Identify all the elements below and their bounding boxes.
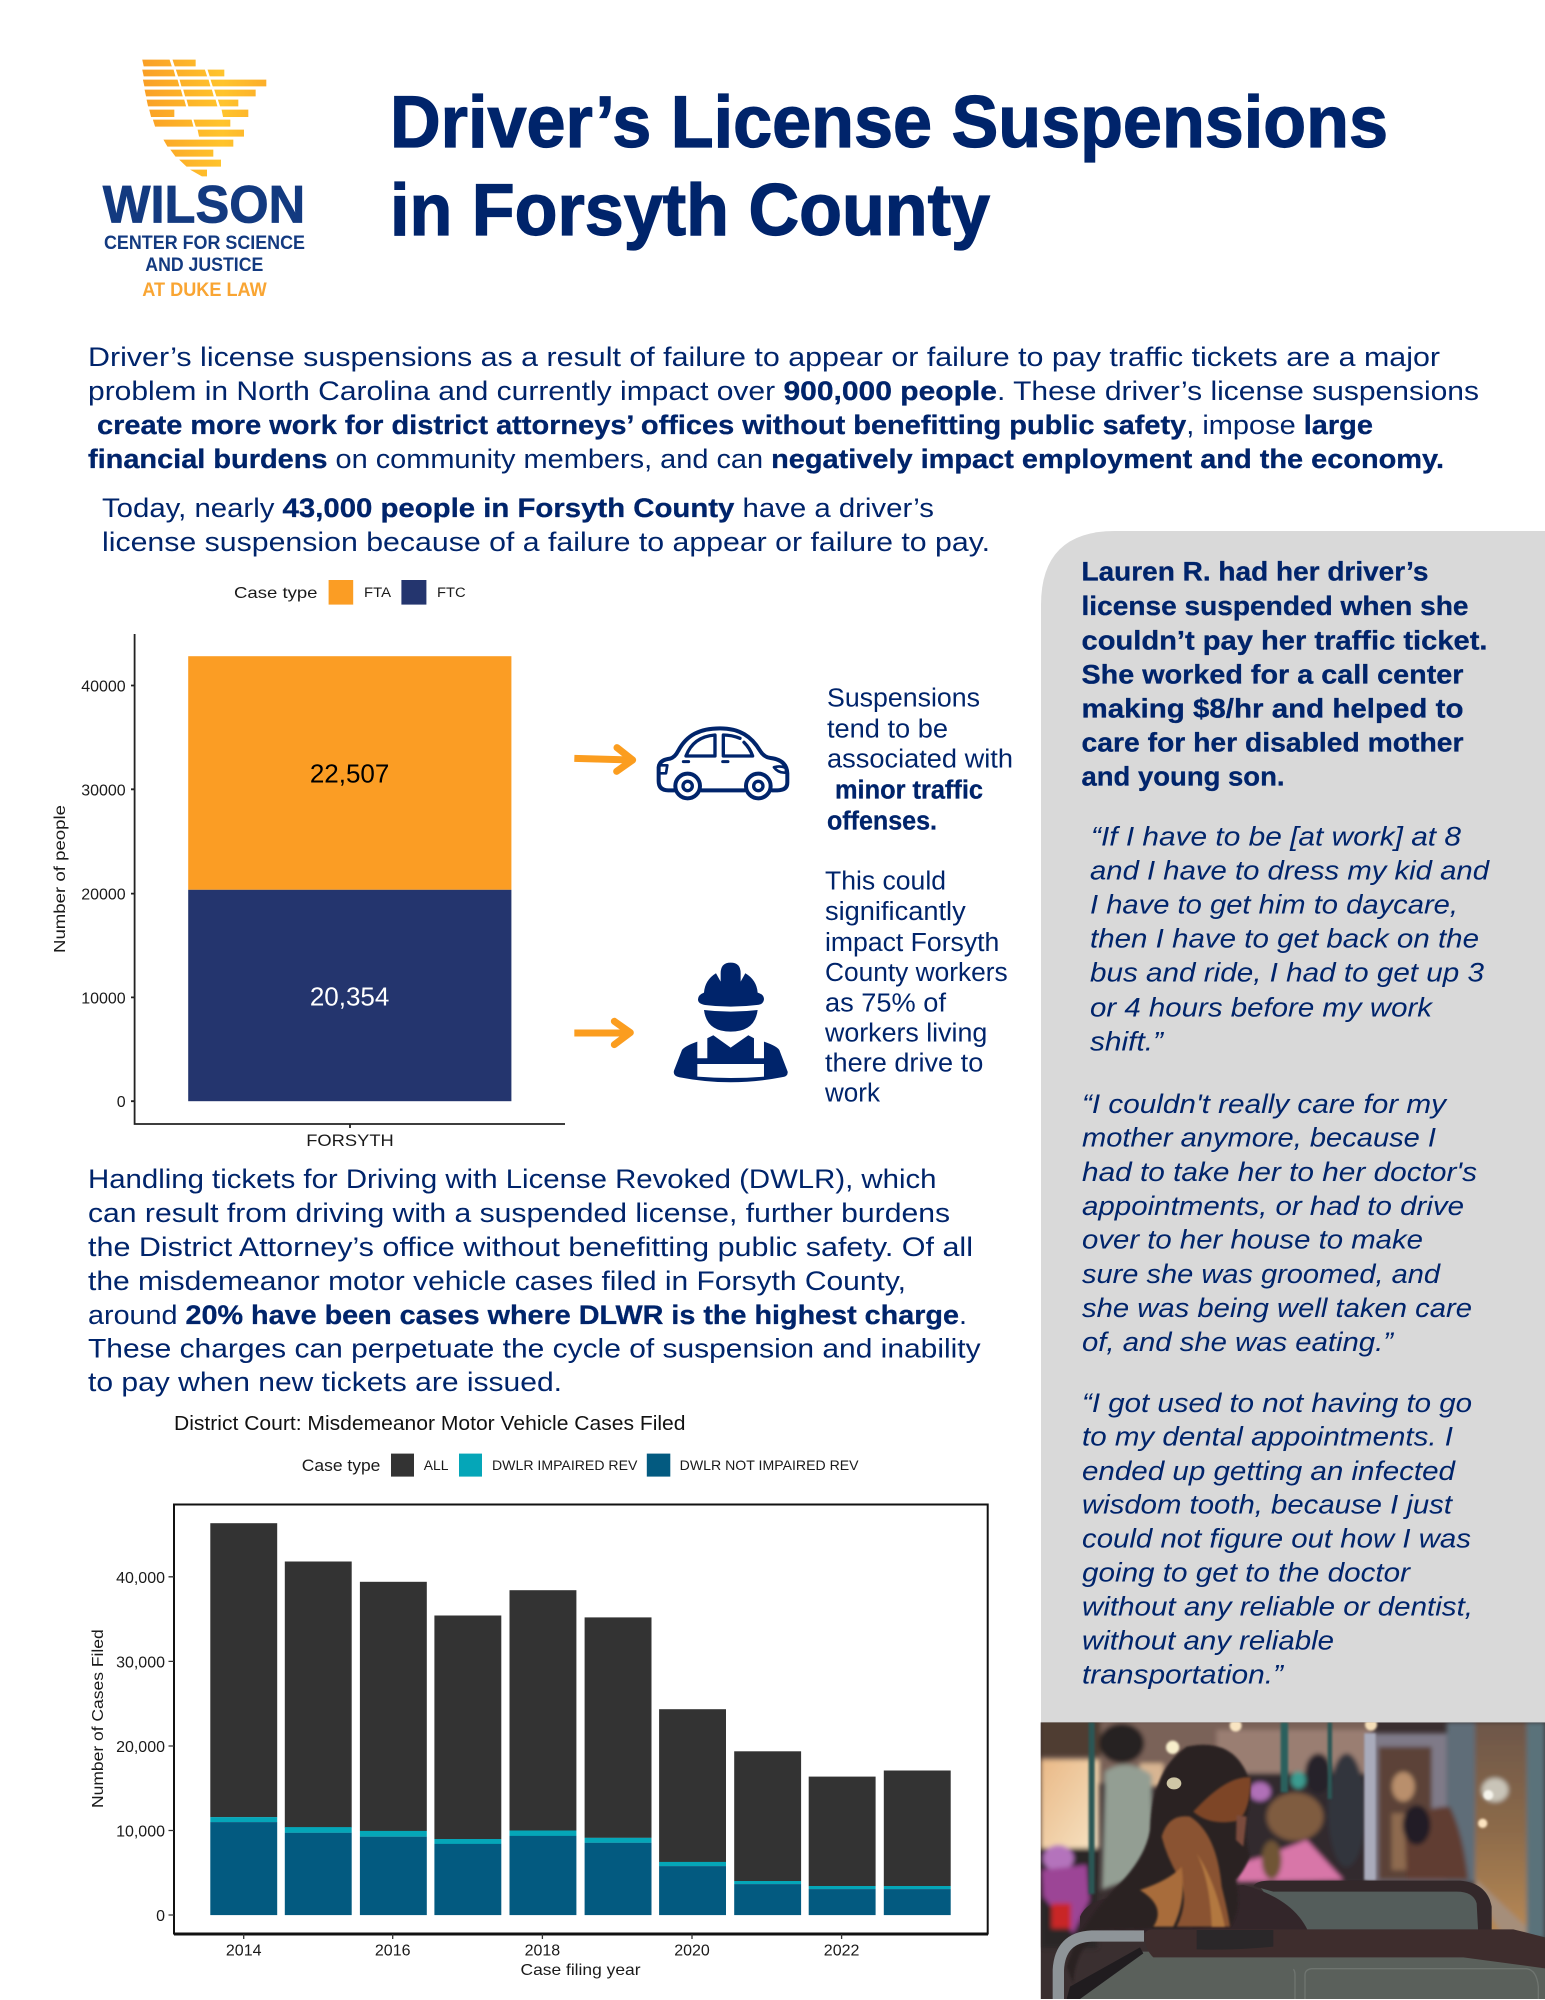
logo: Wilson Center for Science and Justice: AND JUSTICE <box>145 255 263 276</box>
legend: ALL <box>424 1457 449 1473</box>
intro paragraph: create more work for district attorneys’ offices without benefitting public safety , impose large <box>97 410 1373 440</box>
DWLR paragraph: to pay when new tickets are issued. <box>88 1367 562 1397</box>
title: in Forsyth County <box>390 170 990 251</box>
quote 3: “I got used to not having to go <box>1082 1388 1472 1418</box>
legend: FTC <box>437 585 466 600</box>
bar: FTC <box>188 890 511 1101</box>
intro paragraph: problem in North Carolina and currently impact over 900,000 people . These driver’s license suspensions <box>88 376 1479 406</box>
workers text: as 75% of <box>825 990 947 1018</box>
y axis title: Number of people <box>52 805 69 953</box>
quote 3: ended up getting an infected <box>1082 1456 1456 1486</box>
quote 3: without any reliable or dentist, <box>1082 1592 1473 1622</box>
quote 2: appointments, or had to drive <box>1082 1191 1464 1221</box>
workers text <box>824 867 1008 1108</box>
story intro <box>1082 557 1488 792</box>
main hair silhouette <box>1067 1745 1250 1983</box>
DWLR paragraph: the misdemeanor motor vehicle cases filed in Forsyth County, <box>88 1266 906 1296</box>
chart title: District Court: Misdemeanor Motor Vehicle Cases Filed <box>174 1413 686 1435</box>
bar: FTC: 20,354 <box>310 981 389 1011</box>
story intro: Lauren R. had her driver’s <box>1082 557 1428 587</box>
quote 2: had to take her to her doctor's <box>1082 1157 1477 1187</box>
quote 3: wisdom tooth, because I just <box>1082 1490 1454 1520</box>
logo: Wilson Center for Science and Justice: CENTER FOR SCIENCE <box>104 233 305 254</box>
logo: Wilson Center for Science and Justice: WILSON <box>103 176 305 235</box>
quote 2: of, and she was eating.” <box>1082 1327 1394 1357</box>
quote 1: then I have to get back on the <box>1090 924 1479 954</box>
workers text: work <box>824 1080 880 1108</box>
workers text: This could <box>825 867 946 895</box>
legend: DWLR IMPAIRED REV <box>492 1457 638 1473</box>
suspensions text: offenses. <box>827 807 937 835</box>
workers text: impact Forsyth <box>825 929 999 957</box>
y axis tick labels: 10000 <box>81 990 126 1007</box>
quote 2: “I couldn't really care for my <box>1082 1089 1448 1119</box>
front seat panel <box>1075 1952 1545 1999</box>
quote 3: to my dental appointments. I <box>1082 1422 1454 1452</box>
Forsyth statistic paragraph: license suspension because of a failure to appear or failure to pay. <box>102 527 990 557</box>
quote 1: “If I have to be [at work] at 8 <box>1091 822 1461 852</box>
y axis tick labels: 20,000 <box>116 1739 165 1756</box>
y axis title: Number of Cases Filed <box>90 1629 107 1808</box>
x axis title: Case filing year <box>520 1962 641 1979</box>
bar: FTA: 22,507 <box>310 759 389 789</box>
story intro: She worked for a call center <box>1082 660 1464 690</box>
legend: DWLR NOT IMPAIRED REV <box>680 1457 859 1473</box>
legend: Case type <box>302 1456 380 1475</box>
plot frame <box>174 1504 988 1934</box>
quote 3: going to get to the doctor <box>1082 1557 1411 1587</box>
quote 2 <box>1082 1089 1477 1357</box>
DWLR paragraph: can result from driving with a suspended license, further burdens <box>88 1198 950 1228</box>
story intro: care for her disabled mother <box>1082 727 1464 757</box>
DWLR paragraph <box>88 1164 981 1397</box>
y axis tick labels <box>81 678 126 1111</box>
suspensions text: associated with <box>827 746 1013 774</box>
jacket <box>1080 1885 1308 1933</box>
bar: FTA <box>188 656 511 890</box>
chart: misdemeanor motor vehicle cases filed <box>90 1413 988 1979</box>
quote 3: without any reliable <box>1082 1626 1334 1656</box>
y axis tick labels <box>116 1570 165 1925</box>
suspensions text: minor traffic <box>835 777 983 805</box>
quote 1: and I have to dress my kid and <box>1090 856 1490 886</box>
DWLR paragraph: the District Attorney’s office without benefitting public safety. Of all <box>88 1232 973 1262</box>
logo: Wilson Center for Science and Justice <box>103 60 305 301</box>
metal handrail <box>1058 1936 1144 1999</box>
intro paragraph: Driver’s license suspensions as a result of failure to appear or failure to pay traffic tickets are a major <box>88 342 1440 372</box>
DWLR paragraph: around 20% have been cases where DLWR is the highest charge . <box>88 1300 967 1330</box>
x axis tick labels: 2018 <box>525 1943 560 1960</box>
workers text: there drive to <box>825 1050 983 1078</box>
quote 2: over to her house to make <box>1082 1225 1423 1255</box>
story intro: making $8/hr and helped to <box>1082 694 1464 724</box>
DWLR paragraph: Handling tickets for Driving with License Revoked (DWLR), which <box>88 1164 936 1194</box>
y axis tick labels: 30,000 <box>116 1654 165 1671</box>
legend <box>234 580 466 605</box>
second seat <box>1256 1882 1490 1930</box>
quote 1: I have to get him to daycare, <box>1090 890 1458 920</box>
title: Driver’s License Suspensions <box>390 82 1388 163</box>
quote 2: mother anymore, because I <box>1082 1123 1437 1153</box>
y axis tick labels: 0 <box>156 1908 165 1925</box>
y axis tick labels: 0 <box>117 1094 126 1111</box>
bars: ALL cases <box>210 1523 951 1886</box>
hair highlights <box>1193 1777 1251 1822</box>
quote 2: she was being well taken care <box>1082 1293 1472 1323</box>
intro paragraph <box>88 342 1479 474</box>
legend <box>302 1454 859 1477</box>
bars: DWLR not impaired <box>210 1822 951 1915</box>
x axis tick labels: 2014 <box>226 1943 262 1960</box>
chart: suspensions by case type <box>52 580 565 1150</box>
quote 1: or 4 hours before my work <box>1090 992 1434 1022</box>
legend: Case type <box>234 585 318 602</box>
quote 1: bus and ride, I had to get up 3 <box>1090 957 1484 987</box>
Forsyth statistic paragraph: Today, nearly 43,000 people in Forsyth County have a driver’s <box>102 493 934 523</box>
suspensions text: Suspensions <box>827 685 980 713</box>
title <box>390 82 1388 251</box>
x axis tick labels: 2016 <box>375 1943 411 1960</box>
quote 3: transportation.” <box>1082 1660 1284 1690</box>
panel: Lauren R. story <box>1041 531 1545 1723</box>
x axis tick labels: 2020 <box>674 1943 710 1960</box>
y axis tick labels: 30000 <box>81 782 126 799</box>
x axis tick labels: 2022 <box>824 1943 859 1960</box>
x axis tick labels <box>226 1943 859 1960</box>
photo: woman riding a bus <box>1041 1719 1545 1999</box>
y axis tick labels: 40,000 <box>116 1570 165 1587</box>
arrow to car <box>574 748 633 771</box>
workers text: workers living <box>824 1020 987 1048</box>
story intro: license suspended when she <box>1082 591 1468 621</box>
workers text: County workers <box>825 959 1008 987</box>
workers text: significantly <box>825 898 966 926</box>
legend: FTA <box>364 585 391 600</box>
Forsyth statistic paragraph <box>102 493 990 557</box>
logo mark: striped shield <box>143 60 266 176</box>
story intro: couldn’t pay her traffic ticket. <box>1082 625 1488 655</box>
quote 1 <box>1090 822 1490 1056</box>
icon: car <box>659 728 787 798</box>
bars: DWLR impaired <box>210 1817 951 1889</box>
axes <box>131 634 565 1128</box>
quote 1: shift.” <box>1090 1026 1164 1056</box>
arrow to worker <box>574 1021 630 1045</box>
x axis label: FORSYTH <box>306 1131 394 1150</box>
quote 3: could not figure out how I was <box>1082 1524 1471 1554</box>
icon: construction worker <box>674 963 788 1082</box>
story intro: and young son. <box>1082 762 1284 792</box>
y axis tick labels: 40000 <box>81 678 126 696</box>
y axis tick labels: 20000 <box>81 887 126 904</box>
panel background <box>1041 531 1545 1723</box>
quote 3 <box>1082 1388 1473 1690</box>
DWLR paragraph: These charges can perpetuate the cycle of suspension and inability <box>88 1334 981 1364</box>
y axis tick labels: 10,000 <box>116 1824 165 1840</box>
quote 2: sure she was groomed, and <box>1082 1259 1441 1289</box>
suspensions text: tend to be <box>827 716 948 744</box>
intro paragraph: financial burdens on community members, and can negatively impact employment and the economy. <box>88 444 1444 474</box>
suspensions text <box>827 685 1013 835</box>
logo: Wilson Center for Science and Justice: AT DUKE LAW <box>142 280 267 301</box>
